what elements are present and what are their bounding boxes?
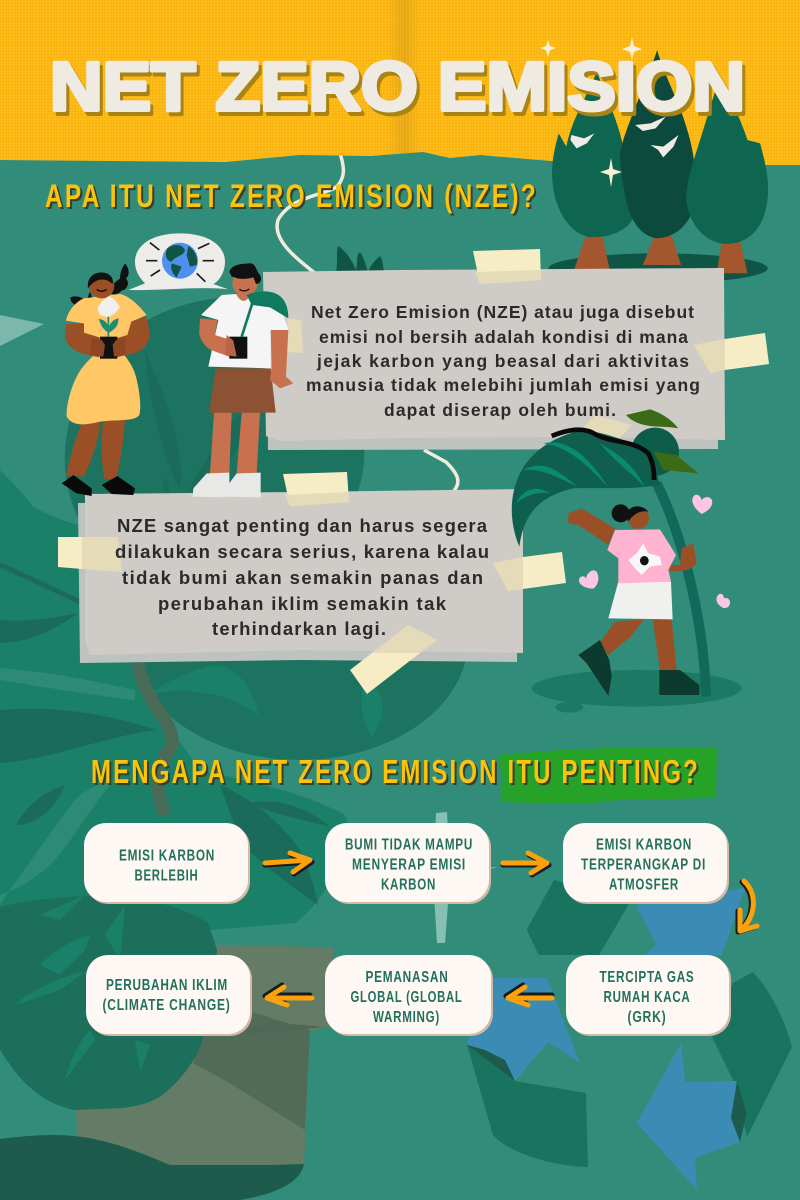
- hand: [225, 335, 237, 357]
- sparkle stars: [540, 37, 642, 187]
- card: greenhouse gas: (GRK): [628, 1009, 666, 1026]
- character: girl under leaf: [512, 409, 742, 713]
- tape: left: [58, 537, 82, 569]
- card: earth cannot absorb: [325, 823, 491, 904]
- tape: bottom: [350, 653, 420, 694]
- giant leaf: [512, 430, 660, 547]
- sparkle: small: [540, 40, 556, 57]
- giant leaf stem: [657, 483, 706, 697]
- card body: [325, 823, 489, 902]
- tape: bottom: [575, 415, 632, 440]
- card shadow: [327, 825, 491, 904]
- definition text: Net Zero Emision (NZE) atau juga disebut: [311, 302, 694, 322]
- smile: [239, 289, 249, 291]
- card: earth cannot absorb: KARBON: [381, 876, 436, 894]
- yellow fabric header band: [0, 0, 800, 165]
- panel: importance: perubahan iklim semakin tak: [158, 593, 447, 614]
- card: global warming: GLOBAL (GLOBAL: [350, 989, 462, 1006]
- neck: [236, 294, 251, 301]
- card body: [84, 823, 248, 902]
- tape: top overlapping: [285, 492, 349, 506]
- tree: left crown: [552, 72, 636, 237]
- head: [89, 273, 114, 298]
- panel: importance: [58, 472, 566, 694]
- speech bubble with earth: [128, 233, 228, 290]
- card shadow: [327, 957, 493, 1036]
- arrow: card 4 to 5: [506, 985, 552, 1005]
- hair bun: [612, 504, 630, 522]
- background blob: below second panel: [132, 520, 468, 760]
- flower centre: [640, 556, 649, 565]
- boots: [578, 640, 699, 696]
- birds on trees: [570, 117, 679, 157]
- panel: definition: dapat diserap oleh bumi.: [384, 400, 616, 420]
- flower: [97, 296, 120, 317]
- braid: left beads: [70, 292, 93, 311]
- shorts: [209, 368, 276, 413]
- panel paper: [263, 268, 725, 441]
- hair: [626, 506, 648, 522]
- globe rays: [146, 243, 214, 282]
- heading: what is NZE: APA ITU NET ZERO EMISION (NZE)?: [45, 178, 538, 214]
- leaf bud: [631, 428, 679, 476]
- boy with plant: [193, 263, 293, 497]
- card label: PEMANASAN: [366, 969, 448, 986]
- shoes: [193, 473, 261, 497]
- white ribbon line: [277, 150, 458, 492]
- card: excess carbon: [84, 823, 250, 904]
- card: greenhouse gas: [566, 955, 731, 1036]
- arrow: card 3 to 4: [738, 881, 757, 932]
- background blob: behind characters: [65, 297, 364, 580]
- card body: [86, 955, 250, 1034]
- plant pot: [74, 945, 333, 1168]
- background leaf stems: [0, 480, 168, 602]
- card label: EMISI KARBON: [596, 836, 692, 854]
- legs: [66, 418, 125, 481]
- characters: girl and boy with plants: [62, 233, 293, 497]
- band weave: [0, 0, 800, 165]
- trees: [548, 50, 768, 283]
- card label: BUMI TIDAK MAMPU: [345, 836, 473, 854]
- pot dark band: [245, 1022, 325, 1034]
- plant pot shading: [193, 1000, 310, 1130]
- panel: importance: terhindarkan lagi.: [212, 618, 386, 639]
- tape: top overlapping: [475, 270, 541, 284]
- recycle: blue lower arrow: [637, 1043, 747, 1190]
- recycle: dark arrow top: [529, 882, 626, 953]
- recycle: blue left arrow: [467, 978, 580, 1081]
- panel paper: [85, 489, 523, 655]
- panel backing sheet: [266, 280, 718, 450]
- card: carbon trapped: TERPERANGKAP DI: [581, 856, 706, 874]
- recycle icon: [467, 882, 792, 1190]
- card: global warming: WARMING): [373, 1009, 440, 1026]
- globe continents: [166, 245, 197, 277]
- recycle: blue top arrow: [636, 888, 745, 955]
- dress skirt: [67, 352, 140, 424]
- green tape behind heading: [498, 748, 717, 804]
- tape: bottom overlapping: [372, 625, 437, 653]
- skirt: [608, 582, 673, 619]
- leaf veins: [516, 442, 645, 503]
- background leaf: lighter leaves on lower blob: [147, 665, 383, 737]
- recycle: dark fold right: [731, 1081, 747, 1142]
- arms: [199, 318, 293, 388]
- ground under trees: [548, 253, 768, 283]
- heart medium: [579, 570, 598, 589]
- importance text: NZE sangat penting dan harus segera: [117, 515, 488, 536]
- sparkle: medium: [622, 37, 642, 60]
- panel: definition: manusia tidak melebihi jumlah emisi yang: [306, 375, 700, 395]
- pot: [100, 337, 117, 359]
- background leaf: pale streaks: [0, 668, 135, 905]
- leaf black edge: [552, 430, 654, 480]
- hands: [90, 338, 126, 357]
- card body: [563, 823, 727, 902]
- tape: top: [283, 472, 349, 506]
- tree: left trunk: [574, 233, 610, 270]
- arrow: card 2 to 3: [503, 853, 549, 875]
- tree: right trunk: [717, 240, 747, 273]
- tape: right: [523, 552, 566, 589]
- small ground spot: [555, 702, 583, 713]
- recycle: right green band: [712, 972, 792, 1137]
- background leaf: medium green foliage: [0, 470, 352, 1010]
- panel: importance: dilakukan secara serius, karena kalau: [115, 541, 489, 562]
- panel: definition: emisi nol bersih adalah kondisi di mana: [319, 327, 688, 347]
- card body: [566, 955, 729, 1034]
- floor shadow: [0, 1135, 304, 1200]
- panel: definition: [263, 249, 769, 450]
- card: global warming: [325, 955, 493, 1036]
- plant stem: [242, 300, 253, 337]
- braid: right: [110, 263, 129, 294]
- grass tuft: [336, 246, 395, 272]
- background blob: lower left leaf mass: [0, 896, 217, 1110]
- recycle: left green band: [467, 1045, 588, 1167]
- card: greenhouse gas: RUMAH KACA: [604, 989, 690, 1006]
- card shadow: [88, 957, 252, 1036]
- other arm and fist: [668, 543, 697, 572]
- panel: definition: jejak karbon yang beasal dari aktivitas: [316, 351, 689, 371]
- hair: [88, 273, 113, 288]
- heart small: [716, 594, 730, 608]
- t-shirt: [201, 294, 288, 368]
- shirt: [607, 529, 676, 583]
- shirt flower: [628, 543, 662, 575]
- plant stem and leaves: [100, 317, 118, 337]
- panel: importance: tidak bumi akan semakin panas dan: [122, 567, 483, 588]
- tape: top: [473, 249, 541, 284]
- card: earth cannot absorb: MENYERAP EMISI: [352, 856, 466, 874]
- tree: right crown: [686, 80, 768, 244]
- heart large: [692, 495, 712, 514]
- card: climate change: [86, 955, 252, 1036]
- olive leaf right: [653, 452, 698, 473]
- card: excess carbon: BERLEBIH: [134, 868, 198, 884]
- tape: left overlapping: [82, 537, 122, 572]
- head: [628, 508, 649, 529]
- card label: TERCIPTA GAS: [600, 969, 694, 986]
- olive leaf top: [626, 409, 678, 428]
- background leaves: small leaves on dark mass: [15, 895, 150, 1080]
- tape: right overlapping: [694, 339, 725, 373]
- card: climate change: (CLIMATE CHANGE): [102, 997, 230, 1014]
- card: carbon trapped: ATMOSFER: [609, 876, 679, 894]
- card shadow: [568, 957, 731, 1036]
- pale sparkle at left edge: [0, 315, 44, 346]
- globe: [162, 243, 198, 279]
- arrow: card 1 to 2: [265, 853, 312, 874]
- ground shadow: [532, 670, 742, 707]
- card label: EMISI KARBON: [119, 848, 215, 864]
- legs: [210, 413, 260, 473]
- braids: [70, 263, 129, 311]
- card body: [325, 955, 491, 1034]
- card shadow: [86, 825, 250, 904]
- panel backing sheet: [78, 503, 517, 663]
- head: [232, 271, 258, 296]
- waving arm: [568, 508, 615, 545]
- tape: right: [725, 333, 769, 370]
- card: carbon trapped: [563, 823, 729, 904]
- sparkle: on tree: [600, 158, 622, 187]
- recycle: dark fold left: [467, 1045, 515, 1081]
- plant leaf: [247, 291, 288, 318]
- card shadow: [565, 825, 729, 904]
- background leaves: dark leaves: [0, 350, 330, 905]
- plant stem: [138, 663, 172, 815]
- band base: [0, 0, 800, 165]
- dress top: [66, 294, 147, 338]
- smile: [97, 289, 107, 291]
- tape: right overlapping: [493, 557, 523, 591]
- title: NET ZERO EMISION: [50, 48, 745, 125]
- tree: centre trunk: [643, 233, 681, 265]
- tree: centre crown: [620, 50, 695, 238]
- bubble shape: [128, 233, 228, 290]
- pot: [229, 337, 247, 359]
- legs: [599, 619, 677, 670]
- shoes: [62, 475, 135, 496]
- girl with flower: [62, 263, 150, 496]
- arrow: card 5 to 6: [265, 985, 312, 1005]
- pale sparkle behind cards: [425, 812, 498, 943]
- hair: [229, 263, 261, 284]
- arms: [65, 316, 150, 357]
- tape: left: [287, 318, 303, 353]
- card label: PERUBAHAN IKLIM: [106, 977, 228, 994]
